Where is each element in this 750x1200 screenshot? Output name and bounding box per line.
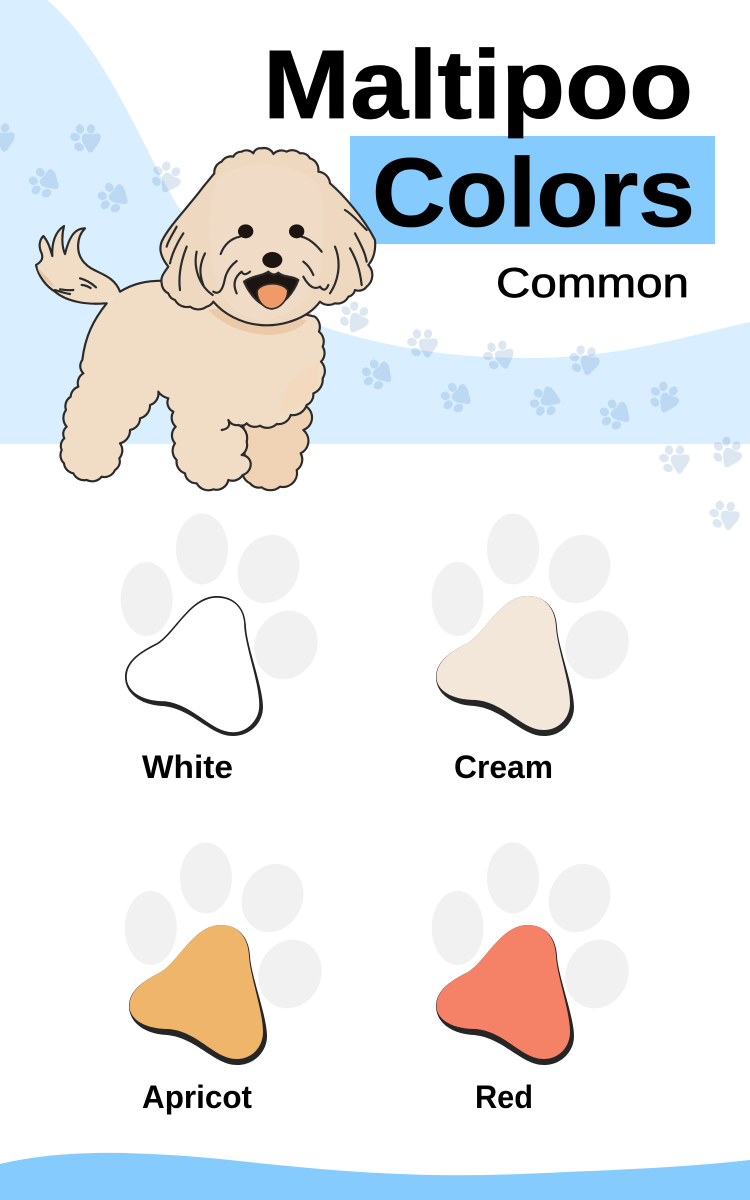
dog tongue <box>257 284 288 309</box>
dog head <box>160 148 375 325</box>
bottom wave <box>0 1153 750 1200</box>
dog face highlight <box>210 164 323 320</box>
color card: Red <box>432 842 640 1115</box>
dog nose <box>262 252 282 268</box>
dog eyes <box>238 224 253 238</box>
dog hind leg <box>242 405 312 490</box>
label: Cream: Cream <box>454 749 553 785</box>
dog fur lines <box>167 210 367 295</box>
illustration: dog <box>36 148 375 490</box>
background paw prints <box>0 123 746 530</box>
background wave panel <box>0 0 750 444</box>
color card: White <box>121 514 329 785</box>
label: Red: Red <box>475 1079 533 1115</box>
label: Apricot: Apricot <box>142 1079 252 1115</box>
dog shading <box>208 307 307 335</box>
dog mouth <box>244 272 298 307</box>
title: Maltipoo: Maltipoo <box>263 30 693 139</box>
title: Colors: Colors <box>372 138 695 247</box>
dog belly fold <box>222 420 238 430</box>
dog body <box>60 281 325 490</box>
color card: Apricot <box>125 842 333 1115</box>
label: White: White <box>142 749 233 785</box>
title highlight box <box>350 136 715 244</box>
color card: Cream <box>432 514 640 785</box>
subtitle: Common: Common <box>496 259 689 306</box>
dog tail <box>36 226 120 304</box>
